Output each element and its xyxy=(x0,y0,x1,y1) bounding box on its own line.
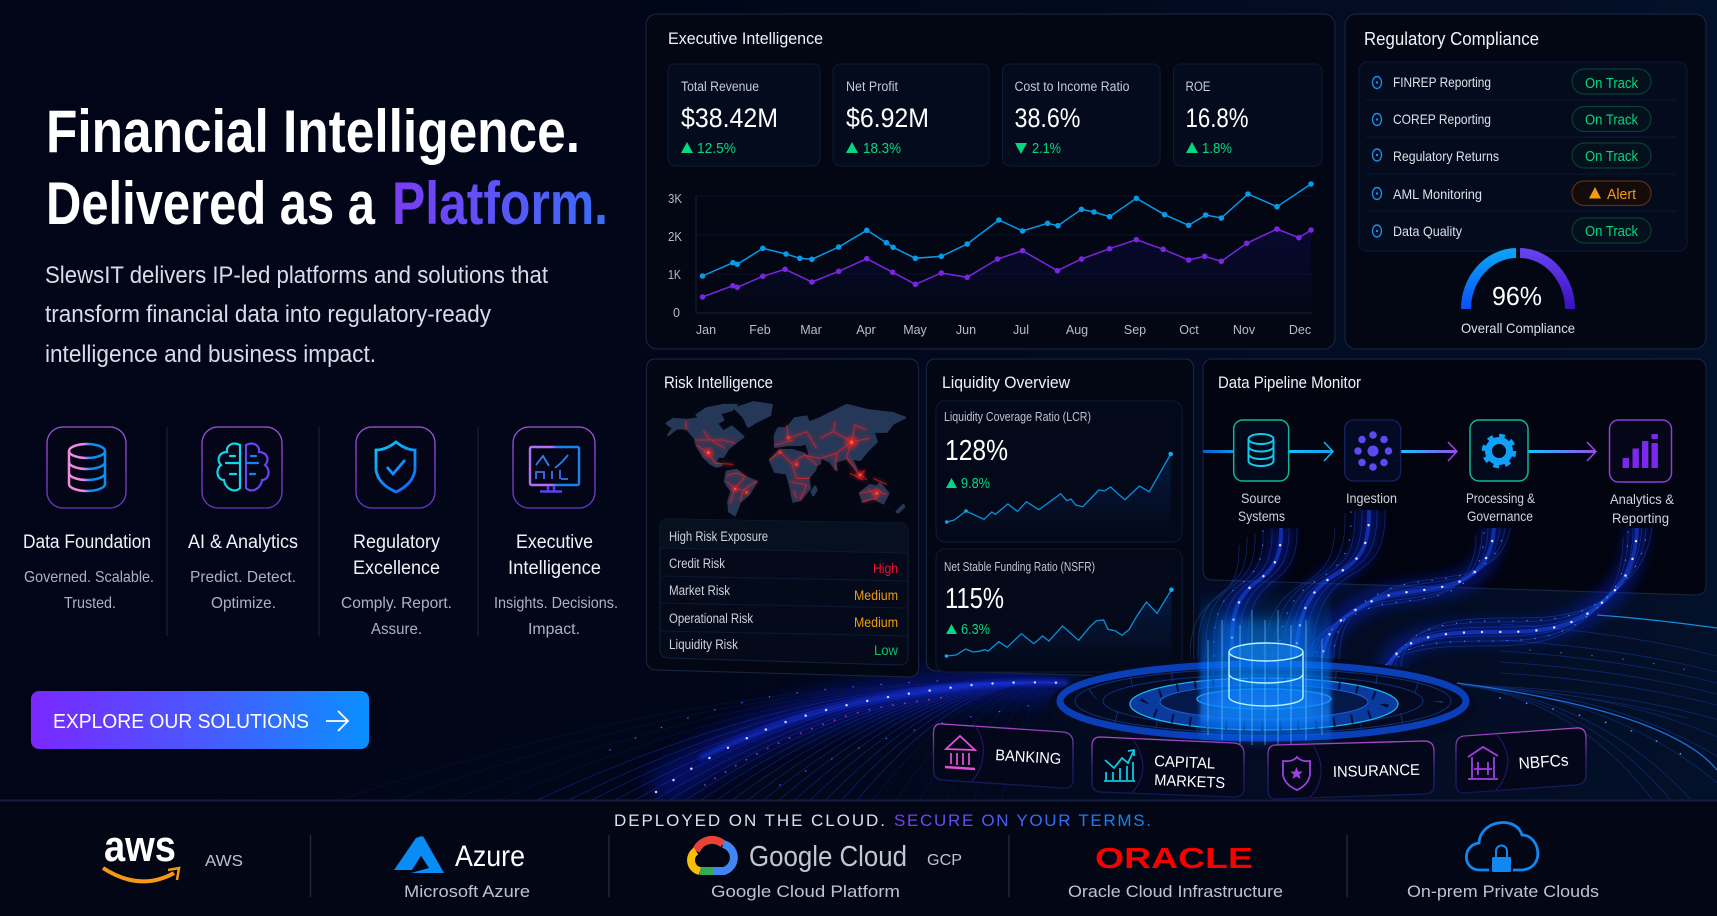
line chart: monthly trend: Oct xyxy=(1179,323,1199,337)
heading: executive intelligence: Executive Intelligence xyxy=(668,29,823,48)
left sweep of data lines xyxy=(338,680,1068,800)
footer tagline xyxy=(614,811,1151,830)
logo: google cloud: GCP xyxy=(927,852,962,869)
step: processing and governance xyxy=(1466,420,1536,524)
step: source systems: Source xyxy=(1241,490,1281,506)
capability: data foundation: Data Foundation xyxy=(23,532,151,553)
flow arrows xyxy=(1203,442,1596,461)
card: liquidity coverage ratio: 128% xyxy=(945,435,1008,467)
table: high risk exposure: Medium xyxy=(854,614,898,630)
line chart: monthly trend: Apr xyxy=(856,323,876,337)
line chart: monthly trend: Jun xyxy=(956,323,976,337)
logo: on-prem private cloud xyxy=(1407,823,1599,901)
right sweep of data lines xyxy=(1457,615,1717,800)
kpi: total revenue: Total Revenue xyxy=(681,79,759,94)
line chart: monthly trend: Jan xyxy=(696,323,716,337)
capability: data foundation: Trusted. xyxy=(64,595,116,612)
capability: executive intelligence: Insights. Decisions. xyxy=(494,595,618,612)
headline: Financial Intelligence. xyxy=(46,98,580,165)
logo: microsoft azure xyxy=(394,836,530,901)
kpi: net profit: $6.92M xyxy=(846,103,929,133)
footer band xyxy=(0,800,1717,916)
panel: data pipeline monitor xyxy=(1203,359,1706,595)
table: high risk exposure: High Risk Exposure xyxy=(669,529,768,544)
compliance checklist: On Track xyxy=(1585,112,1639,128)
step: analytics and reporting xyxy=(1610,420,1675,526)
line chart: monthly trend: Nov xyxy=(1233,323,1256,337)
gauge: overall compliance: Overall Compliance xyxy=(1461,320,1575,336)
card: net stable funding ratio xyxy=(936,549,1182,672)
kpi: cost to income ratio: 2.1% xyxy=(1032,140,1061,157)
line chart: monthly trend: 1K xyxy=(668,268,682,282)
card: net stable funding ratio: 115% xyxy=(945,583,1004,615)
table: high risk exposure: Low xyxy=(874,642,899,658)
step: ingestion: Ingestion xyxy=(1346,490,1397,506)
panel: executive intelligence xyxy=(646,14,1335,349)
kpi: roe: ROE xyxy=(1186,79,1210,94)
table: high risk exposure: Credit Risk xyxy=(669,556,725,571)
logo: on-prem private cloud: On-prem Private Clouds xyxy=(1407,882,1599,901)
chip: banking: BANKING xyxy=(995,747,1062,768)
kpi: total revenue: $38.42M xyxy=(681,103,778,133)
line chart: monthly trend: Jul xyxy=(1013,323,1029,337)
table: high risk exposure: High xyxy=(873,560,898,576)
button: explore our solutions: EXPLORE OUR SOLUTIONS xyxy=(53,711,309,733)
logo: aws xyxy=(103,822,243,881)
chip: capital markets xyxy=(1092,737,1244,797)
capability: regulatory excellence: Comply. Report. xyxy=(341,595,452,612)
headline xyxy=(46,98,608,237)
line chart: monthly trend: 0 xyxy=(673,306,680,320)
logo: microsoft azure: Microsoft Azure xyxy=(404,882,530,901)
chip: banking xyxy=(934,724,1073,788)
logo: aws: AWS xyxy=(205,853,243,870)
panel: risk intelligence xyxy=(646,359,919,677)
chip: nbfcs: NBFCs xyxy=(1518,752,1569,773)
world risk map xyxy=(667,402,905,515)
kpi: net profit: Net Profit xyxy=(846,79,898,94)
heading: data pipeline monitor: Data Pipeline Monitor xyxy=(1218,373,1361,392)
step: analytics and reporting: Analytics & xyxy=(1610,491,1675,507)
central data platform xyxy=(1048,590,1478,756)
chip: insurance xyxy=(1268,741,1434,799)
panel: regulatory compliance xyxy=(1345,14,1706,349)
line chart: monthly trend: 2K xyxy=(668,230,683,244)
card: liquidity coverage ratio: 9.8% xyxy=(961,476,990,492)
kpi: total revenue: 12.5% xyxy=(697,140,736,157)
table: high risk exposure: Market Risk xyxy=(669,583,730,598)
compliance checklist: Regulatory Returns xyxy=(1393,148,1499,164)
compliance checklist: AML Monitoring xyxy=(1393,186,1482,202)
kpi: net profit: 18.3% xyxy=(863,140,901,157)
intro paragraph: transform financial data into regulatory-ready xyxy=(45,301,491,328)
kpi: cost to income ratio xyxy=(1002,64,1160,166)
line chart: monthly trend xyxy=(668,184,1312,337)
kpi: roe: 1.8% xyxy=(1202,140,1232,157)
line chart: monthly trend: May xyxy=(903,323,928,337)
compliance checklist: Data Quality xyxy=(1393,223,1462,239)
intro paragraph: SlewsIT delivers IP-led platforms and solutions that xyxy=(45,262,548,289)
headline: Delivered as a xyxy=(46,170,376,237)
chip: capital markets: MARKETS xyxy=(1154,772,1225,792)
intro paragraph xyxy=(45,262,548,368)
logo: aws: aws xyxy=(104,822,176,871)
logo: oracle: Oracle Cloud Infrastructure xyxy=(1068,882,1283,901)
button: explore our solutions xyxy=(31,691,369,749)
chip: capital markets: CAPITAL xyxy=(1154,753,1216,773)
gauge: overall compliance xyxy=(1461,253,1575,336)
capability: regulatory excellence: Regulatory xyxy=(353,532,440,553)
compliance checklist xyxy=(1359,62,1687,251)
logo: google cloud: Google Cloud Platform xyxy=(711,882,900,901)
line chart: monthly trend: Feb xyxy=(749,323,771,337)
kpi: roe xyxy=(1174,64,1322,166)
heading: risk intelligence: Risk Intelligence xyxy=(664,373,773,392)
heading: regulatory compliance: Regulatory Compliance xyxy=(1364,29,1539,49)
card: liquidity coverage ratio xyxy=(936,401,1182,542)
capability: executive intelligence: Intelligence xyxy=(508,558,601,579)
line chart: monthly trend: Sep xyxy=(1124,323,1146,337)
card: net stable funding ratio: Net Stable Funding Ratio (NSFR) xyxy=(944,560,1095,574)
capability: data foundation xyxy=(23,427,154,612)
kpi: cost to income ratio: Cost to Income Ratio xyxy=(1014,79,1130,94)
kpi: net profit xyxy=(833,64,989,166)
line chart: monthly trend: Mar xyxy=(800,323,822,337)
glowing data streams xyxy=(1190,510,1655,669)
capability: regulatory excellence: Excellence xyxy=(353,558,440,579)
compliance checklist: Alert xyxy=(1607,187,1636,203)
card: net stable funding ratio: 6.3% xyxy=(961,622,990,638)
logo: microsoft azure: Azure xyxy=(455,840,525,873)
capability dividers xyxy=(167,427,478,636)
capability: ai and analytics: Optimize. xyxy=(211,595,276,612)
kpi: cost to income ratio: 38.6% xyxy=(1014,103,1080,133)
chip: nbfcs xyxy=(1456,728,1586,793)
capability: ai and analytics xyxy=(188,427,298,612)
intro paragraph: intelligence and business impact. xyxy=(45,341,376,368)
table: high risk exposure xyxy=(660,519,908,665)
headline: Platform. xyxy=(392,170,608,237)
capability: ai and analytics: AI & Analytics xyxy=(188,532,298,553)
capability: regulatory excellence xyxy=(341,427,452,638)
chip: insurance: INSURANCE xyxy=(1333,762,1420,781)
gauge: overall compliance: 96% xyxy=(1492,281,1542,311)
capability: executive intelligence xyxy=(494,427,618,638)
logo: oracle: ORACLE xyxy=(1095,843,1253,875)
step: processing and governance: Governance xyxy=(1467,508,1533,524)
compliance checklist: On Track xyxy=(1585,76,1639,92)
footer tagline: SECURE ON YOUR TERMS. xyxy=(894,811,1151,830)
compliance checklist: On Track xyxy=(1585,149,1639,165)
capability: executive intelligence: Executive xyxy=(516,532,593,553)
footer tagline: DEPLOYED ON THE CLOUD. xyxy=(614,811,885,830)
capability: executive intelligence: Impact. xyxy=(528,621,580,638)
logo: oracle xyxy=(1068,843,1283,901)
capability: ai and analytics: Predict. Detect. xyxy=(190,569,296,586)
compliance checklist: COREP Reporting xyxy=(1393,111,1491,127)
step: analytics and reporting: Reporting xyxy=(1612,510,1669,526)
step: ingestion xyxy=(1345,420,1401,506)
step: processing and governance: Processing & xyxy=(1466,490,1536,506)
capability: regulatory excellence: Assure. xyxy=(371,621,422,638)
logo: google cloud: Google Cloud xyxy=(749,841,907,873)
heading: liquidity overview: Liquidity Overview xyxy=(942,373,1071,392)
card: liquidity coverage ratio: Liquidity Coverage Ratio (LCR) xyxy=(944,410,1091,424)
compliance checklist: FINREP Reporting xyxy=(1393,74,1491,90)
panel: liquidity overview xyxy=(926,359,1194,678)
capability: data foundation: Governed. Scalable. xyxy=(24,569,154,586)
table: high risk exposure: Liquidity Risk xyxy=(669,637,738,652)
line chart: monthly trend: 3K xyxy=(668,192,683,206)
step: source systems: Systems xyxy=(1238,508,1285,524)
table: high risk exposure: Operational Risk xyxy=(669,611,753,626)
line chart: monthly trend: Aug xyxy=(1066,323,1088,337)
step: source systems xyxy=(1234,420,1289,524)
logo: google cloud xyxy=(691,840,962,901)
line chart: monthly trend: Dec xyxy=(1289,323,1311,337)
kpi: total revenue xyxy=(668,64,820,166)
compliance checklist: On Track xyxy=(1585,224,1639,240)
kpi: roe: 16.8% xyxy=(1186,103,1248,133)
table: high risk exposure: Medium xyxy=(854,587,898,603)
